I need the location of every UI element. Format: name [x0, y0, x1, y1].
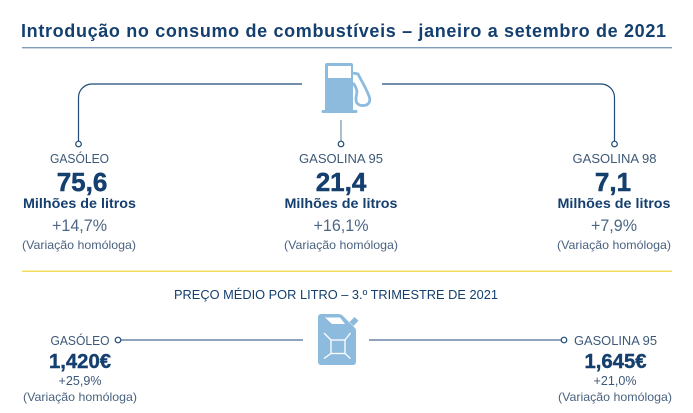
- stat: gasóleo: Milhões de litros: [23, 195, 136, 211]
- stat: gasolina 95: Milhões de litros: [284, 195, 398, 211]
- title: Introdução no consumo de combustíveis – janeiro a setembro de 2021: [21, 21, 666, 41]
- connector: right price: [369, 339, 561, 341]
- connector: right: [382, 84, 614, 141]
- connector: left price: [121, 339, 303, 341]
- icon: jerry can: [318, 314, 358, 365]
- stat: gasolina 95: (Variação homóloga): [284, 238, 398, 252]
- price: gasolina 95: 1,645€: [584, 351, 646, 373]
- price: gasóleo: GASÓLEO: [50, 333, 110, 348]
- stat: gasóleo: GASÓLEO: [50, 151, 109, 166]
- panel: fuel consumption: [22, 63, 671, 252]
- stat: gasolina 98: GASOLINA 98: [572, 151, 656, 166]
- stat: gasolina 98: Milhões de litros: [558, 195, 671, 211]
- price: gasolina 95: GASOLINA 95: [574, 333, 657, 348]
- price: gasóleo: +25,9%: [58, 373, 102, 388]
- icon: fuel pump: [322, 63, 370, 113]
- price: gasolina 95: (Variação homóloga): [558, 390, 672, 404]
- price: gasóleo: 1,420€: [49, 351, 111, 373]
- connector: left: [78, 84, 302, 141]
- panel: average price: [23, 287, 672, 404]
- price: gasolina 95: +21,0%: [594, 373, 637, 388]
- stat: gasóleo: 75,6: [57, 167, 107, 197]
- stat: gasolina 98: [557, 151, 671, 252]
- stat: gasolina 95: [284, 151, 398, 252]
- stat: gasóleo: +14,7%: [52, 216, 107, 235]
- price: gasóleo: (Variação homóloga): [23, 390, 137, 404]
- stat: gasolina 95: 21,4: [316, 167, 367, 197]
- stat: gasolina 98: (Variação homóloga): [557, 238, 671, 252]
- stat: gasolina 98: 7,1: [595, 167, 631, 197]
- stat: gasolina 95: +16,1%: [314, 216, 368, 235]
- price: gasolina 95: [558, 333, 672, 404]
- stat: gasolina 95: GASOLINA 95: [299, 151, 383, 166]
- stat: gasóleo: [22, 151, 136, 252]
- stat: gasóleo: (Variação homóloga): [22, 238, 136, 252]
- stat: gasolina 98: +7,9%: [591, 216, 637, 235]
- price: gasóleo: [23, 333, 137, 404]
- heading: average price: PREÇO MÉDIO POR LITRO – 3.º TRIMESTRE DE 2021: [174, 287, 498, 302]
- connector: center: [340, 120, 342, 141]
